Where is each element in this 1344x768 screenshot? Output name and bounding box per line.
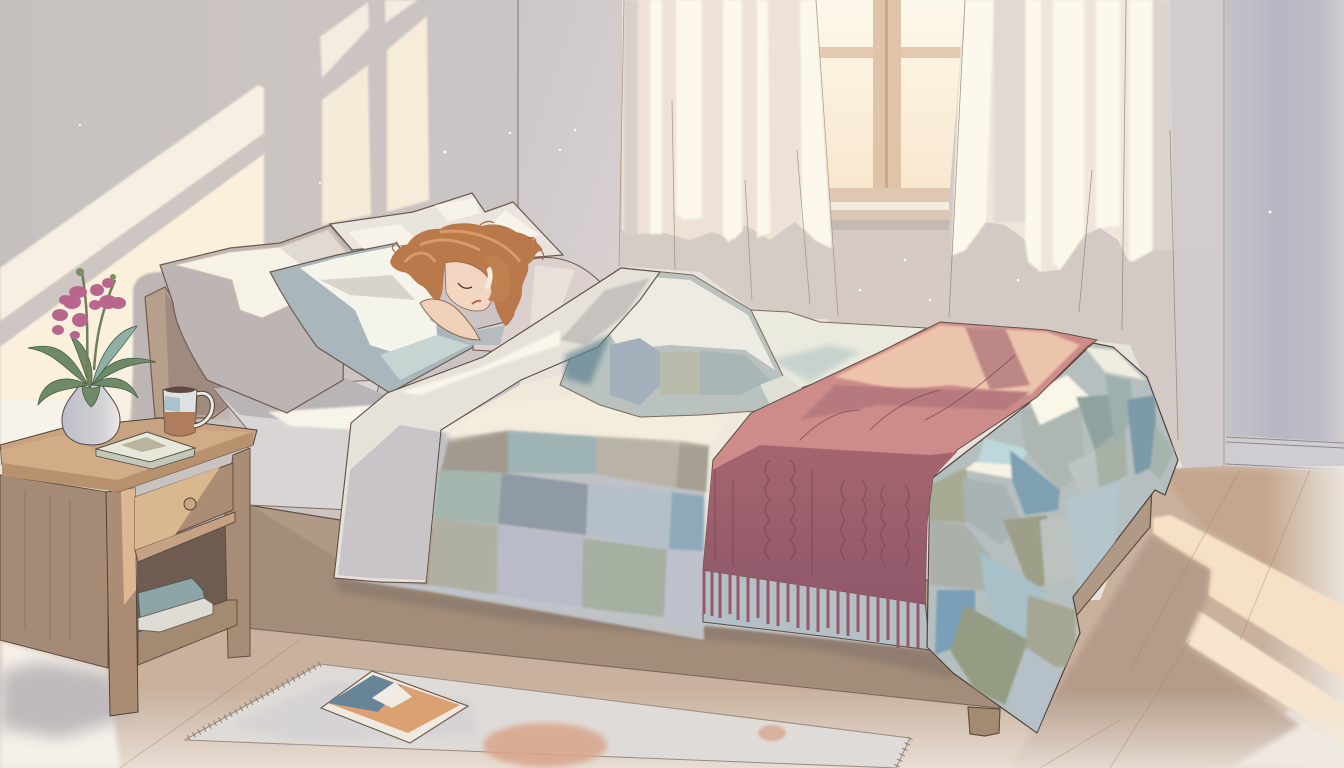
hair xyxy=(390,223,543,326)
mattress xyxy=(213,380,380,510)
front leg xyxy=(106,488,138,716)
headboard xyxy=(145,287,232,418)
quilt top surface xyxy=(440,312,927,470)
right leg xyxy=(225,448,250,658)
right bed surface xyxy=(735,310,927,395)
shelf xyxy=(138,600,237,665)
top xyxy=(0,418,257,492)
bed xyxy=(145,287,1152,736)
knitted pink throw xyxy=(703,322,1097,648)
quilt side panel xyxy=(927,343,1178,733)
book on rug xyxy=(321,671,468,743)
quilt cream lit band xyxy=(445,395,730,445)
mug xyxy=(163,387,212,436)
face xyxy=(445,262,492,311)
book on nightstand xyxy=(96,432,195,469)
curtain: left xyxy=(619,0,838,320)
quilt under fringe xyxy=(703,570,930,650)
hair strand by ear xyxy=(484,256,510,302)
shelf books xyxy=(138,578,205,618)
window xyxy=(815,0,967,230)
baseboard xyxy=(1226,435,1344,474)
floor xyxy=(0,466,1344,768)
bed foot xyxy=(968,707,1000,736)
quilt front patches xyxy=(340,430,930,650)
bed base xyxy=(248,488,1152,708)
inner cavity xyxy=(137,520,228,640)
drawer rail xyxy=(135,512,235,562)
nightshirt xyxy=(473,258,603,352)
fringe xyxy=(704,571,918,648)
sleeping woman xyxy=(390,221,603,352)
white duvet fold xyxy=(334,268,660,583)
pillows xyxy=(160,193,563,413)
sunlight patches on wall xyxy=(0,0,429,660)
back pillow xyxy=(330,193,563,260)
side panel xyxy=(0,475,108,668)
quilt and duvet xyxy=(334,268,1178,733)
pillow under cheek xyxy=(430,300,505,345)
hand xyxy=(420,299,480,340)
curtain: right xyxy=(949,0,1226,472)
back-left pillow xyxy=(160,225,352,413)
rug xyxy=(185,664,910,768)
raised knee section xyxy=(560,268,808,417)
nightstand xyxy=(0,418,257,716)
vase with orchid xyxy=(28,268,156,445)
front pillow xyxy=(270,243,477,393)
dust specks xyxy=(79,124,1271,301)
headboard wall shadow xyxy=(0,134,264,420)
drawer xyxy=(135,463,233,550)
